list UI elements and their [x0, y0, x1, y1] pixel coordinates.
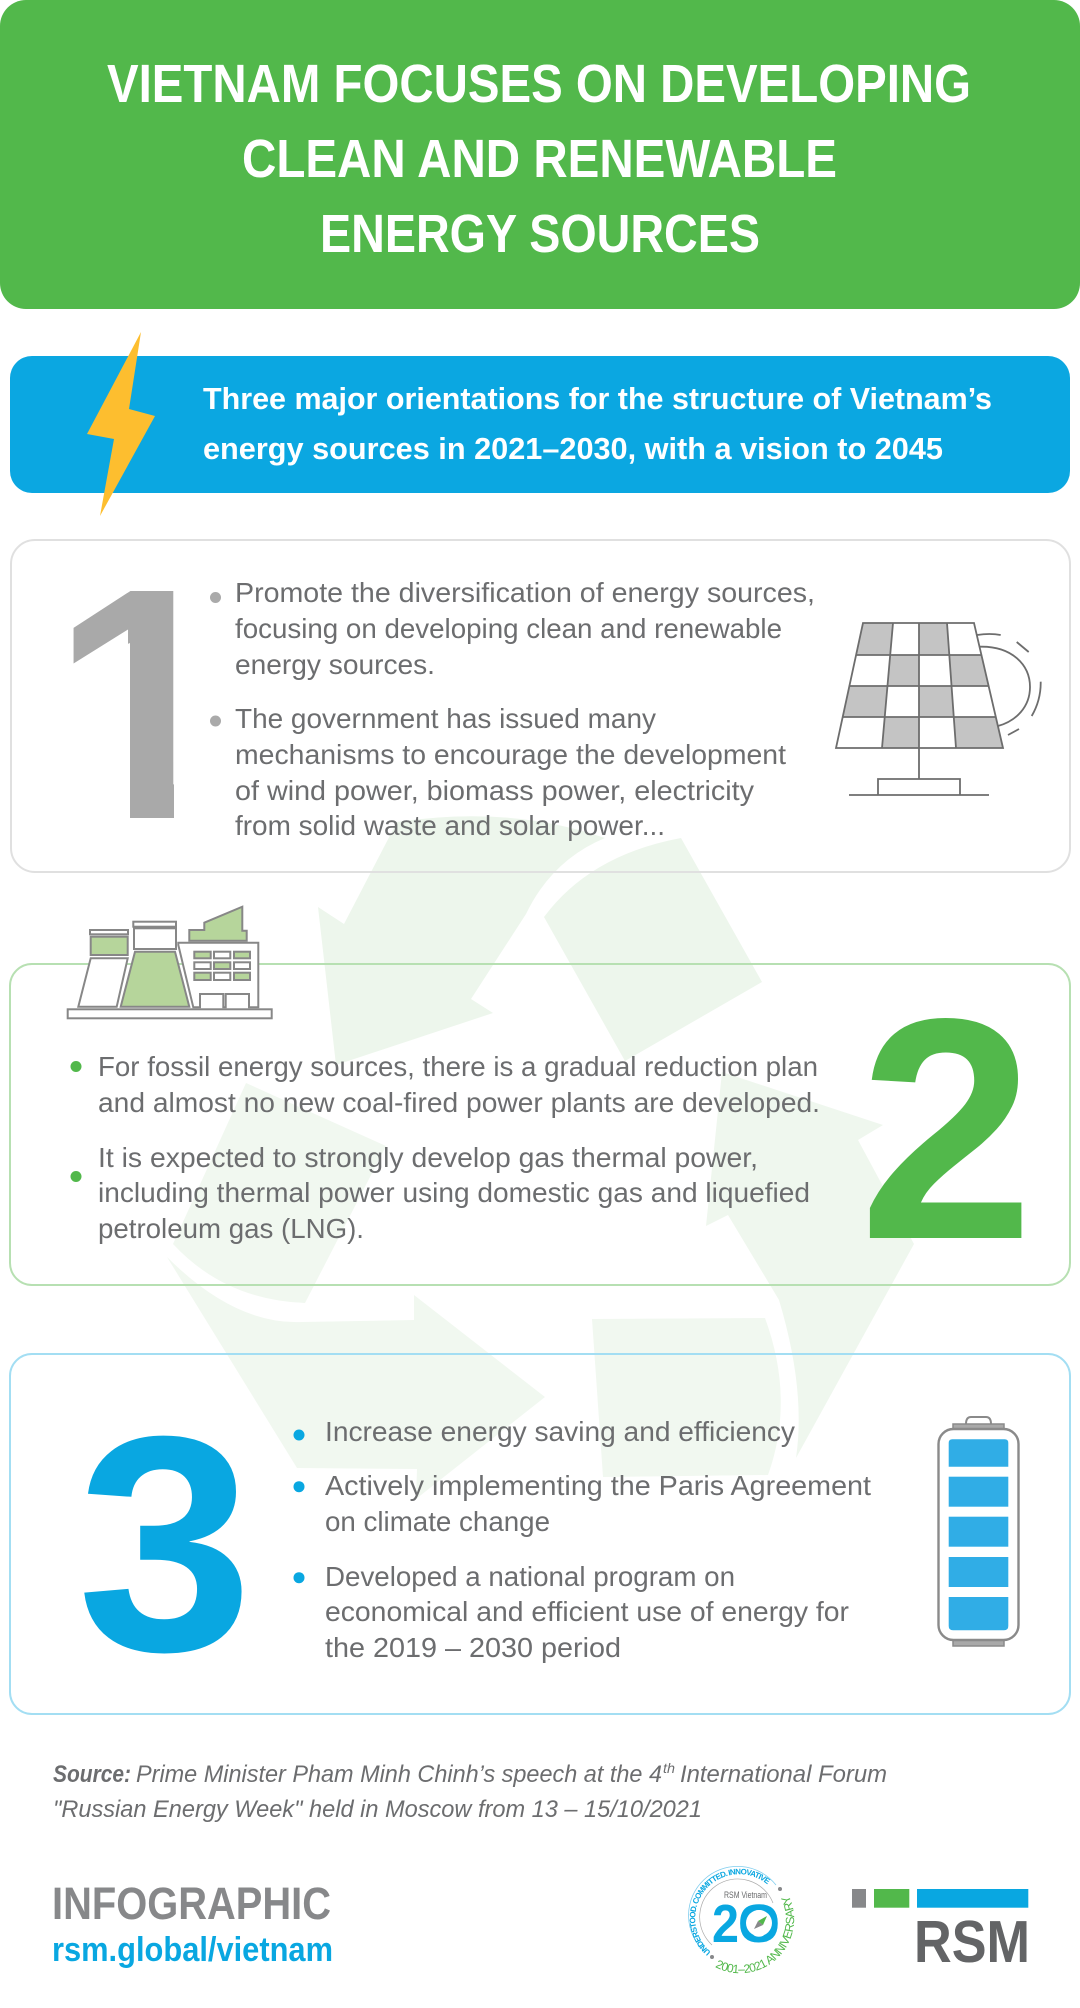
footer label: infographic: INFOGRAPHIC	[52, 1878, 331, 1929]
panel 3: energy saving: on climate change	[325, 1506, 550, 1537]
panel 1: renewable energy: Promote the diversification of energy sources,	[235, 577, 815, 608]
title banner: VIETNAM FOCUSES ON DEVELOPING	[107, 54, 971, 114]
footer label: infographic	[52, 1878, 333, 1969]
panel 2: fossil energy	[10, 907, 1070, 1305]
title banner	[0, 0, 1080, 309]
panel 3: energy saving: Increase energy saving and efficiency	[325, 1416, 795, 1447]
logo: RSM Vietnam 20th anniversary seal	[688, 1866, 794, 1974]
panel 1: renewable energy: focusing on developing clean and renewable	[235, 613, 782, 644]
logo: RSM Vietnam 20th anniversary seal: 2001–2021 ANNIVERSARY	[716, 1898, 794, 1974]
panel 3: energy saving: 3	[77, 1373, 253, 1716]
panel 2: fossil energy: and almost no new coal-fired power plants are developed.	[98, 1087, 820, 1118]
panel 3: energy saving	[10, 1354, 1070, 1716]
panel 1: renewable energy: energy sources.	[235, 649, 435, 680]
footer label: infographic: rsm.global/vietnam	[52, 1931, 333, 1969]
icon: solar panel	[836, 623, 1041, 795]
logo: RSM	[852, 1889, 1030, 1975]
source note: International Forum	[680, 1761, 887, 1788]
panel 2: fossil energy: For fossil energy sources, there is a gradual reduction plan	[98, 1051, 818, 1082]
panel 1: renewable energy: 1	[51, 519, 235, 888]
logo: RSM: RSM	[914, 1909, 1030, 1975]
panel 1: renewable energy: The government has issued many	[235, 703, 656, 734]
logo: RSM Vietnam 20th anniversary seal: 0	[737, 1894, 781, 1954]
panel 2: fossil energy: It is expected to strongly develop gas thermal power,	[98, 1142, 758, 1173]
logo: RSM Vietnam 20th anniversary seal: 2	[712, 1894, 739, 1954]
panel 1: renewable energy: mechanisms to encourage the development	[235, 739, 786, 770]
panel 3: energy saving: Developed a national program on	[325, 1561, 735, 1592]
subtitle banner	[10, 356, 1070, 493]
icon: battery	[938, 1417, 1018, 1646]
panel 1: renewable energy: of wind power, biomass power, electricity	[235, 775, 754, 806]
subtitle banner: Three major orientations for the structure of Vietnam’s	[203, 381, 992, 416]
panel 3: energy saving: Actively implementing the Paris Agreement	[325, 1470, 871, 1501]
source note	[53, 1760, 887, 1823]
logo: RSM Vietnam 20th anniversary seal: UNDERSTOOD. COMMITTED. INNOVATIVE	[690, 1868, 770, 1956]
title banner: CLEAN AND RENEWABLE	[242, 129, 837, 189]
subtitle banner: energy sources in 2021–2030, with a vision to 2045	[203, 431, 943, 466]
logo: RSM Vietnam 20th anniversary seal: RSM Vietnam	[724, 1890, 767, 1901]
source note: Source:	[53, 1761, 131, 1788]
icon: lightning bolt	[87, 332, 155, 516]
panel 3: energy saving: economical and efficient use of energy for	[325, 1596, 849, 1627]
background: recycling symbol	[167, 816, 914, 1499]
source note: th	[663, 1760, 675, 1776]
source note: "Russian Energy Week" held in Moscow from 13 – 15/10/2021	[53, 1796, 702, 1823]
panel 2: fossil energy: petroleum gas (LNG).	[98, 1213, 364, 1244]
source note: Prime Minister Pham Minh Chinh’s speech at the 4	[136, 1761, 662, 1788]
panel 1: renewable energy: from solid waste and solar power...	[235, 810, 665, 841]
panel 2: fossil energy: including thermal power using domestic gas and liquefied	[98, 1177, 810, 1208]
panel 2: fossil energy: 2	[859, 953, 1034, 1305]
panel 1: renewable energy	[11, 519, 1070, 888]
title banner: ENERGY SOURCES	[320, 204, 760, 264]
icon: power plant	[68, 907, 272, 1018]
panel 3: energy saving: the 2019 – 2030 period	[325, 1632, 621, 1663]
